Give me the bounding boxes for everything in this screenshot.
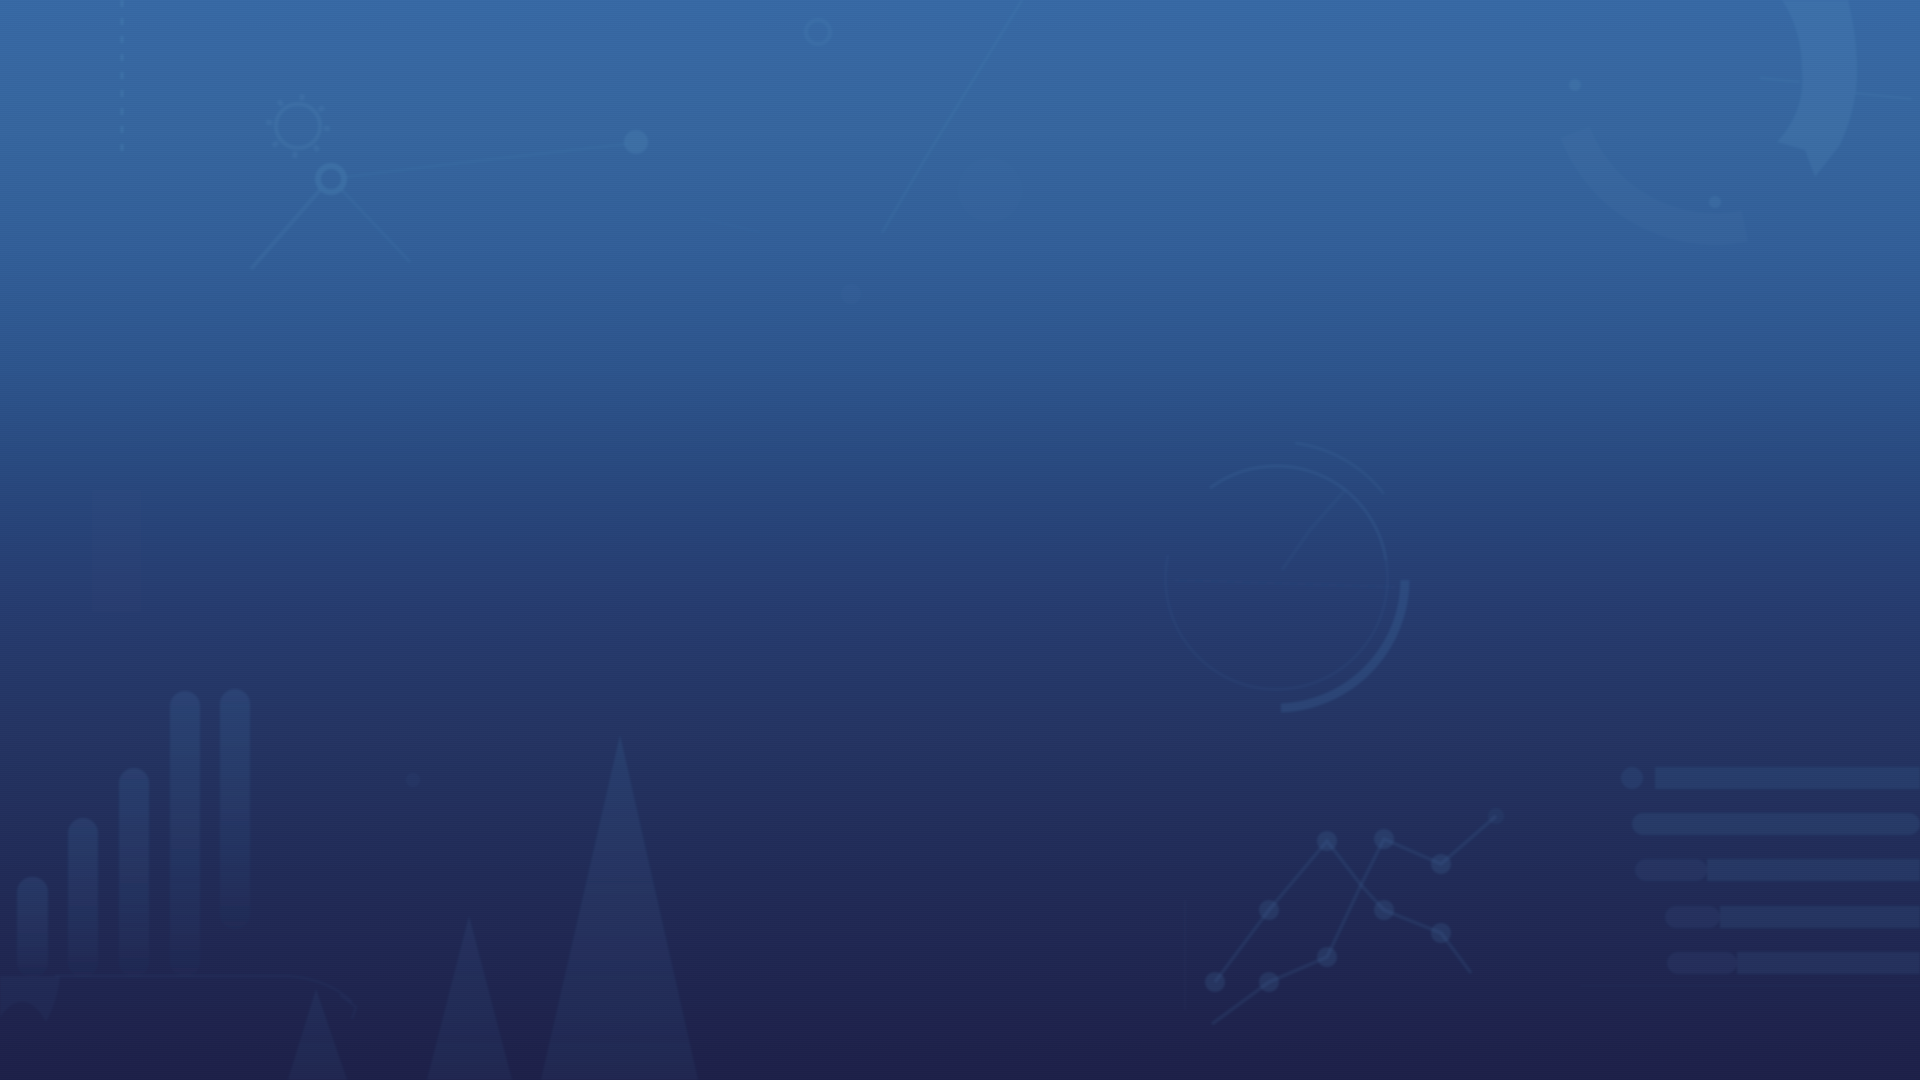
chart baseline with trailing scribble <box>55 976 356 1019</box>
dashed vertical line at top left <box>120 0 124 162</box>
horizontal bar list <box>1580 767 1920 986</box>
radial gauge: centre right <box>1166 443 1405 708</box>
line chart: two series with dots <box>1185 808 1504 1024</box>
bar chart: rounded vertical bars <box>17 689 250 977</box>
faint rectangle panel at left <box>92 490 141 612</box>
network diagram: small gear and long connector at top centre <box>700 0 1022 304</box>
gauge: top right <box>1569 0 1912 229</box>
wave shape at bottom left <box>0 976 60 1022</box>
small dot near lower centre <box>406 773 420 787</box>
triangle chart: three peaks <box>288 735 698 1080</box>
series two <box>1212 808 1504 1024</box>
series one <box>1205 831 1471 992</box>
network diagram: gear, ring and connectors at top left <box>251 97 648 269</box>
